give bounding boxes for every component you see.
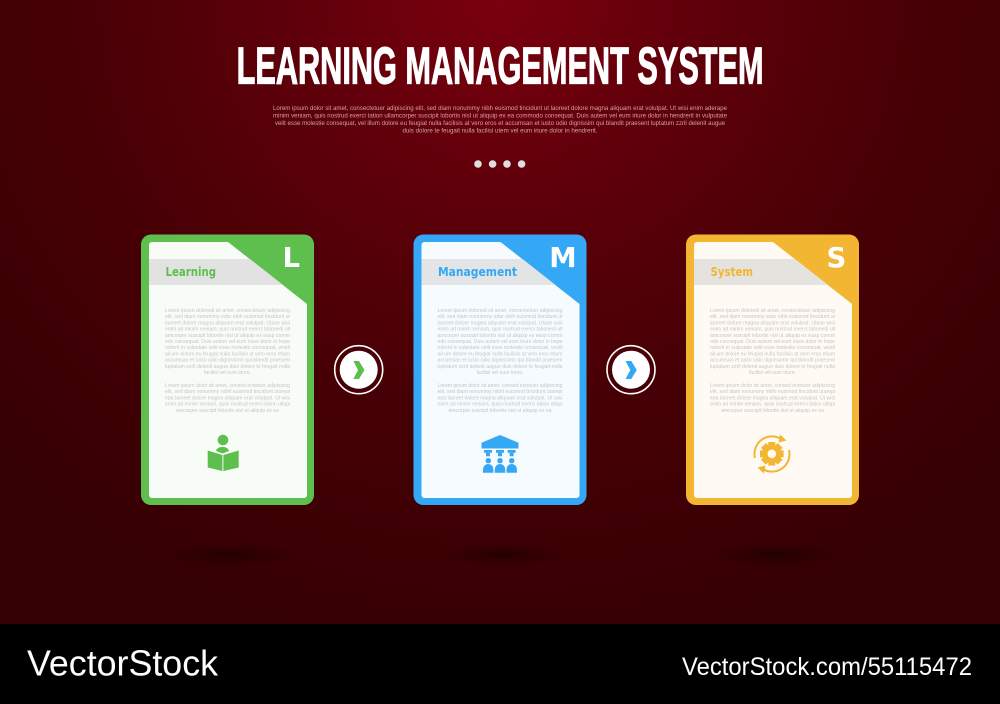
- card inner sheet: [149, 242, 307, 498]
- body text: facilisi vel eum iriure.: [476, 370, 524, 376]
- heading: Learning: [166, 264, 216, 279]
- body text: ail ure dolore eu feugiat nulla facilisis at vero eros etiam: [438, 351, 562, 357]
- body text: enim ad minim veniam, quis nostrud exerci tationedi ull: [710, 327, 835, 333]
- arrow: management to system: [607, 346, 655, 394]
- intro text block: minim veniam, quis nostrud exerci tation ullamcorper suscipit lobortis nisl ut aliquip ex ea commodo consequat. Duis autem vel eum iriure dolor in hendrerit in vulputate: [273, 114, 728, 120]
- body text: ail ure dolore eu feugiat nulla facilisis at vero eros etiam: [165, 351, 290, 357]
- intro text block: [273, 106, 728, 135]
- intro text block: velit esse molestie consequat, vel illum dolore eu feugiat nulla facilisis at vero eros et accumsan et iusto odio dignissim qui blandit praesent luptatum zzril delenit augue: [275, 121, 726, 127]
- body text: odo consequat. Duis autem vel eum iriure dolor in hepe: [438, 339, 563, 345]
- intro text block: duis dolore te feugait nulla facilisi utem vel eum iriure dolor in hendrerit.: [402, 129, 598, 135]
- footer image id: VectorStock.com/55115472: [682, 653, 972, 681]
- body text: Lorem ipsum doloredi sit amet, consectetuer adipiscing: [165, 308, 290, 314]
- body text: facilisi vel eum iriure.: [749, 370, 796, 376]
- body text: luptatum zzril delenit augue duis dolore te feugait nulla: [165, 364, 290, 370]
- heading band: [422, 259, 556, 285]
- card inner sheet: [694, 242, 852, 498]
- body text: ndrerit in vulputate velit esse molestie consequat, vestil: [438, 345, 562, 351]
- body text: epa laoreet dolore magna aliquam erat volutpat. Ut wisi: [165, 395, 290, 401]
- pagination dots: [474, 160, 525, 168]
- body text: amcorper suscipit lobortis nisl ut aliquip ex easp comm: [710, 333, 835, 339]
- arrow: learning to management: [335, 346, 383, 394]
- body text: elit, sed diam nonummy nibhl euismod tincidunt utarepi: [165, 389, 290, 395]
- body text: ail ure dolore eu feugiat nulla facilisis at vero eros etiam: [710, 351, 835, 357]
- intro text block: Lorem ipsum dolor sit amet, consectetuer adipiscing elit, sed diam nonummy nibh euismod tincidunt ut laoreet dolore magna aliquam erat volutpat. Ut wisi enim aderape: [273, 106, 728, 112]
- body text: elit, sed diam nonummy edar nibh euismod tincidunt ut: [438, 314, 563, 320]
- body text: enim ad minim veniam, quis nostrud exerci tationedi ull: [165, 327, 290, 333]
- body text: enim ad minim veniam, quisi nostrud exerci tation ullapi: [165, 402, 290, 408]
- body text: ndrerit in vulputate velit esse molestie consequat, vestil: [710, 345, 835, 351]
- body text: epa laoreet dolore magna aliquam erat volutpat. Ut wisi: [710, 395, 835, 401]
- body text: luptatum zzril delenit augue duis dolore te feugait nulla: [710, 364, 835, 370]
- icon: gear with cycle arrows: [755, 434, 789, 474]
- body text: elit, sed diam nonummy edar nibh euismod tincidunt ut: [710, 314, 836, 320]
- footer bar: [0, 624, 1000, 704]
- body text: accumsan et iusto odio dignissimir qui blandit praesent: [165, 358, 291, 364]
- body text: Lorem ipsum dolor sit amet, consed ectetuer adipiscing: [710, 383, 835, 389]
- body text: accumsan et iusto odio dignissimir qui blandit praesent: [710, 358, 836, 364]
- heading band: [694, 259, 828, 285]
- card frame: [414, 234, 586, 505]
- card frame: [686, 234, 859, 505]
- panel: management: [414, 234, 586, 505]
- card shadows: [162, 543, 843, 567]
- panel: learning: [141, 234, 314, 505]
- icon: institution with people: [482, 435, 518, 473]
- letter M: M: [549, 242, 577, 274]
- panel: system: [686, 234, 859, 505]
- card inner sheet: [422, 242, 580, 498]
- body text: accumsan et iusto odio dignissimir qui blandit praesent: [438, 358, 563, 364]
- body text: odo consequat. Duis autem vel eum iriure dolor in hepe: [710, 339, 835, 345]
- body text: enim ad minim veniam, quisi nostrud exerci tation ullapi: [710, 402, 835, 408]
- body text: laoreet dolore magna aliquam erat volutpat. Utase wisi: [710, 320, 835, 326]
- body text: Lorem ipsum dolor sit amet, consed ectetuer adipiscing: [438, 383, 563, 389]
- heading band: [149, 259, 283, 285]
- body text: amcorper suscipit lobortis nisl ut aliquip ex easp comm: [438, 333, 562, 339]
- body text: epa laoreet dolore magna aliquam erat volutpat. Ut wisi: [438, 395, 562, 401]
- body text: Lorem ipsum doloredi sit amet, consectetuer adipiscing: [438, 308, 563, 314]
- letter S: S: [826, 242, 846, 274]
- body text: elit, sed diam nonummy nibhl euismod tincidunt utarepi: [438, 389, 562, 395]
- body text: facilisi vel eum iriure.: [204, 370, 251, 376]
- body text: Lorem ipsum doloredi sit amet, consectetuer adipiscing: [710, 308, 835, 314]
- body text: elit, sed diam nonummy edar nibh euismod tincidunt ut: [165, 314, 291, 320]
- body text: [710, 308, 836, 414]
- body text: enim ad minim veniam, quis nostrud exerci tationedi ull: [438, 327, 562, 333]
- footer logo: VectorStock: [27, 642, 219, 684]
- body text: amcorper suscipit lobortis nisl ut aliquip ex ea: [176, 408, 279, 414]
- heading: System: [710, 264, 753, 279]
- card frame: [141, 234, 314, 505]
- body text: amcorper suscipit lobortis nisl ut aliquip ex ea: [721, 408, 824, 414]
- body text: odo consequat. Duis autem vel eum iriure dolor in hepe: [165, 339, 290, 345]
- body text: elit, sed diam nonummy nibhl euismod tincidunt utarepi: [710, 389, 835, 395]
- letter L: L: [282, 242, 300, 274]
- body text: Lorem ipsum dolor sit amet, consed ectetuer adipiscing: [165, 383, 290, 389]
- body text: laoreet dolore magna aliquam erat volutpat. Utase wisi: [165, 320, 290, 326]
- body text: amcorper suscipit lobortis nisl ut aliquip ex ea: [448, 408, 552, 414]
- body text: enim ad minim veniam, quisi nostrud exerci tation ullapi: [438, 402, 562, 408]
- icon: person reading book: [208, 435, 239, 471]
- body text: amcorper suscipit lobortis nisl ut aliquip ex easp comm: [165, 333, 290, 339]
- heading: Management: [438, 264, 517, 279]
- body text: [165, 308, 291, 414]
- body text: ndrerit in vulputate velit esse molestie consequat, vestil: [165, 345, 290, 351]
- body text: [438, 308, 563, 414]
- body text: luptatum zzril delenit augue duis dolore te feugait nulla: [438, 364, 563, 370]
- body text: laoreet dolore magna aliquam erat volutpat. Utase wisi: [438, 320, 562, 326]
